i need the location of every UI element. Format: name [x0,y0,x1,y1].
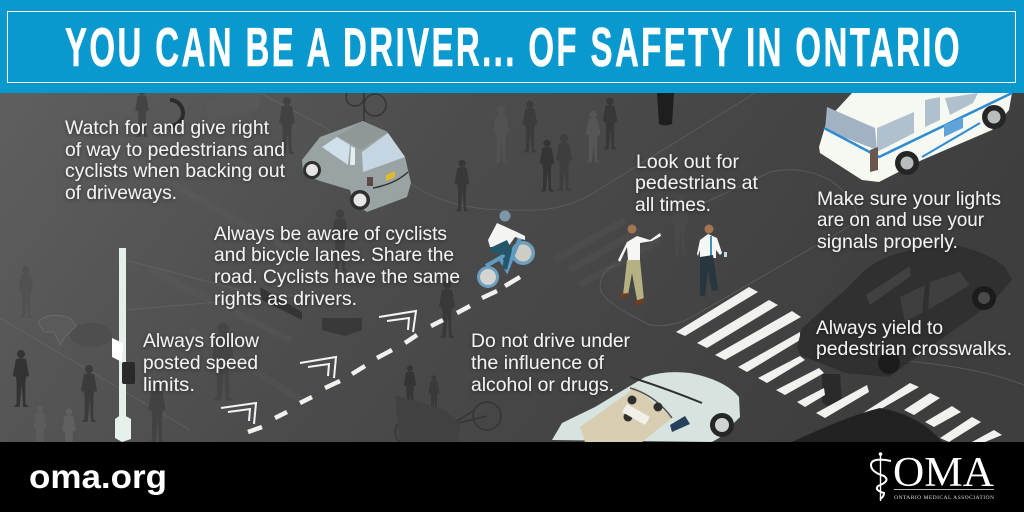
text: lights: signals properly. [817,232,958,253]
text: lights: are on and use your [817,210,985,231]
gray car [302,121,411,212]
crosswalk stripes [676,287,1002,442]
bike lane dashes [248,277,520,432]
faint crosswalk on the road [130,160,660,400]
text: cyclists: rights as drivers. [214,289,357,310]
fire hydrant [657,93,674,126]
text: pedestrians [635,152,759,216]
street scene background [0,93,1024,443]
text: speed limits: Always follow [143,331,259,352]
text: cyclists [214,224,460,310]
curbs and road markings [0,93,1024,430]
background pedestrians [13,88,689,457]
text: impaired driving [471,331,631,396]
text: pedestrians: Look out for [636,152,740,173]
manhole [70,323,112,347]
pedestrian with phone [697,224,727,297]
website url: oma.org [29,458,167,495]
callout text blocks [65,118,1012,396]
speed chevrons [221,311,416,424]
text: driveways [65,118,286,204]
OMA logo: ONTARIO MEDICAL ASSOCIATION [894,495,994,501]
text: impaired driving: the influence of [471,353,605,374]
text: impaired driving: alcohol or drugs. [471,375,614,396]
text: crosswalks [816,318,1012,360]
text: driveways: Watch for and give right [65,118,270,139]
text: crosswalks: Always yield to [816,318,943,339]
pedestrian pointing [618,224,661,306]
text: cyclists: Always be aware of cyclists [214,224,447,245]
street light pole [112,248,135,442]
text: speed limits: posted speed [143,353,258,374]
white police SUV [819,93,1012,182]
title: YOU CAN BE A DRIVER... OF SAFETY IN ONTARIO [65,16,962,78]
title banner [0,0,1024,93]
traffic light signal cluster [322,318,362,336]
dark car at bottom right [792,408,942,442]
text: driveways: of driveways. [65,183,177,204]
text: pedestrians: pedestrians at [635,173,759,194]
cyclist [477,210,535,288]
text: lights: Make sure your lights [817,189,1001,210]
text: speed limits [143,331,259,396]
text: pedestrians: all times. [635,195,711,216]
text: driveways: cyclists when backing out [65,161,286,182]
footer bar [0,442,1024,512]
text: crosswalks: pedestrian crosswalks. [816,339,1012,360]
OMA logo: OMA [893,450,995,496]
text: lights [817,189,1001,253]
text: driveways: of way to pedestrians and [65,140,285,161]
text: cyclists: and bicycle lanes. Share the [214,245,454,266]
bike racks and pedicab [170,88,501,445]
dog [38,315,76,345]
text: cyclists: road. Cyclists have the same [214,267,460,288]
icon: staff with serpent [871,453,891,501]
dark taxi [797,243,1012,377]
text: speed limits: limits. [143,375,195,396]
convertible with driver [552,372,740,442]
text: impaired driving: Do not drive under [471,331,631,352]
